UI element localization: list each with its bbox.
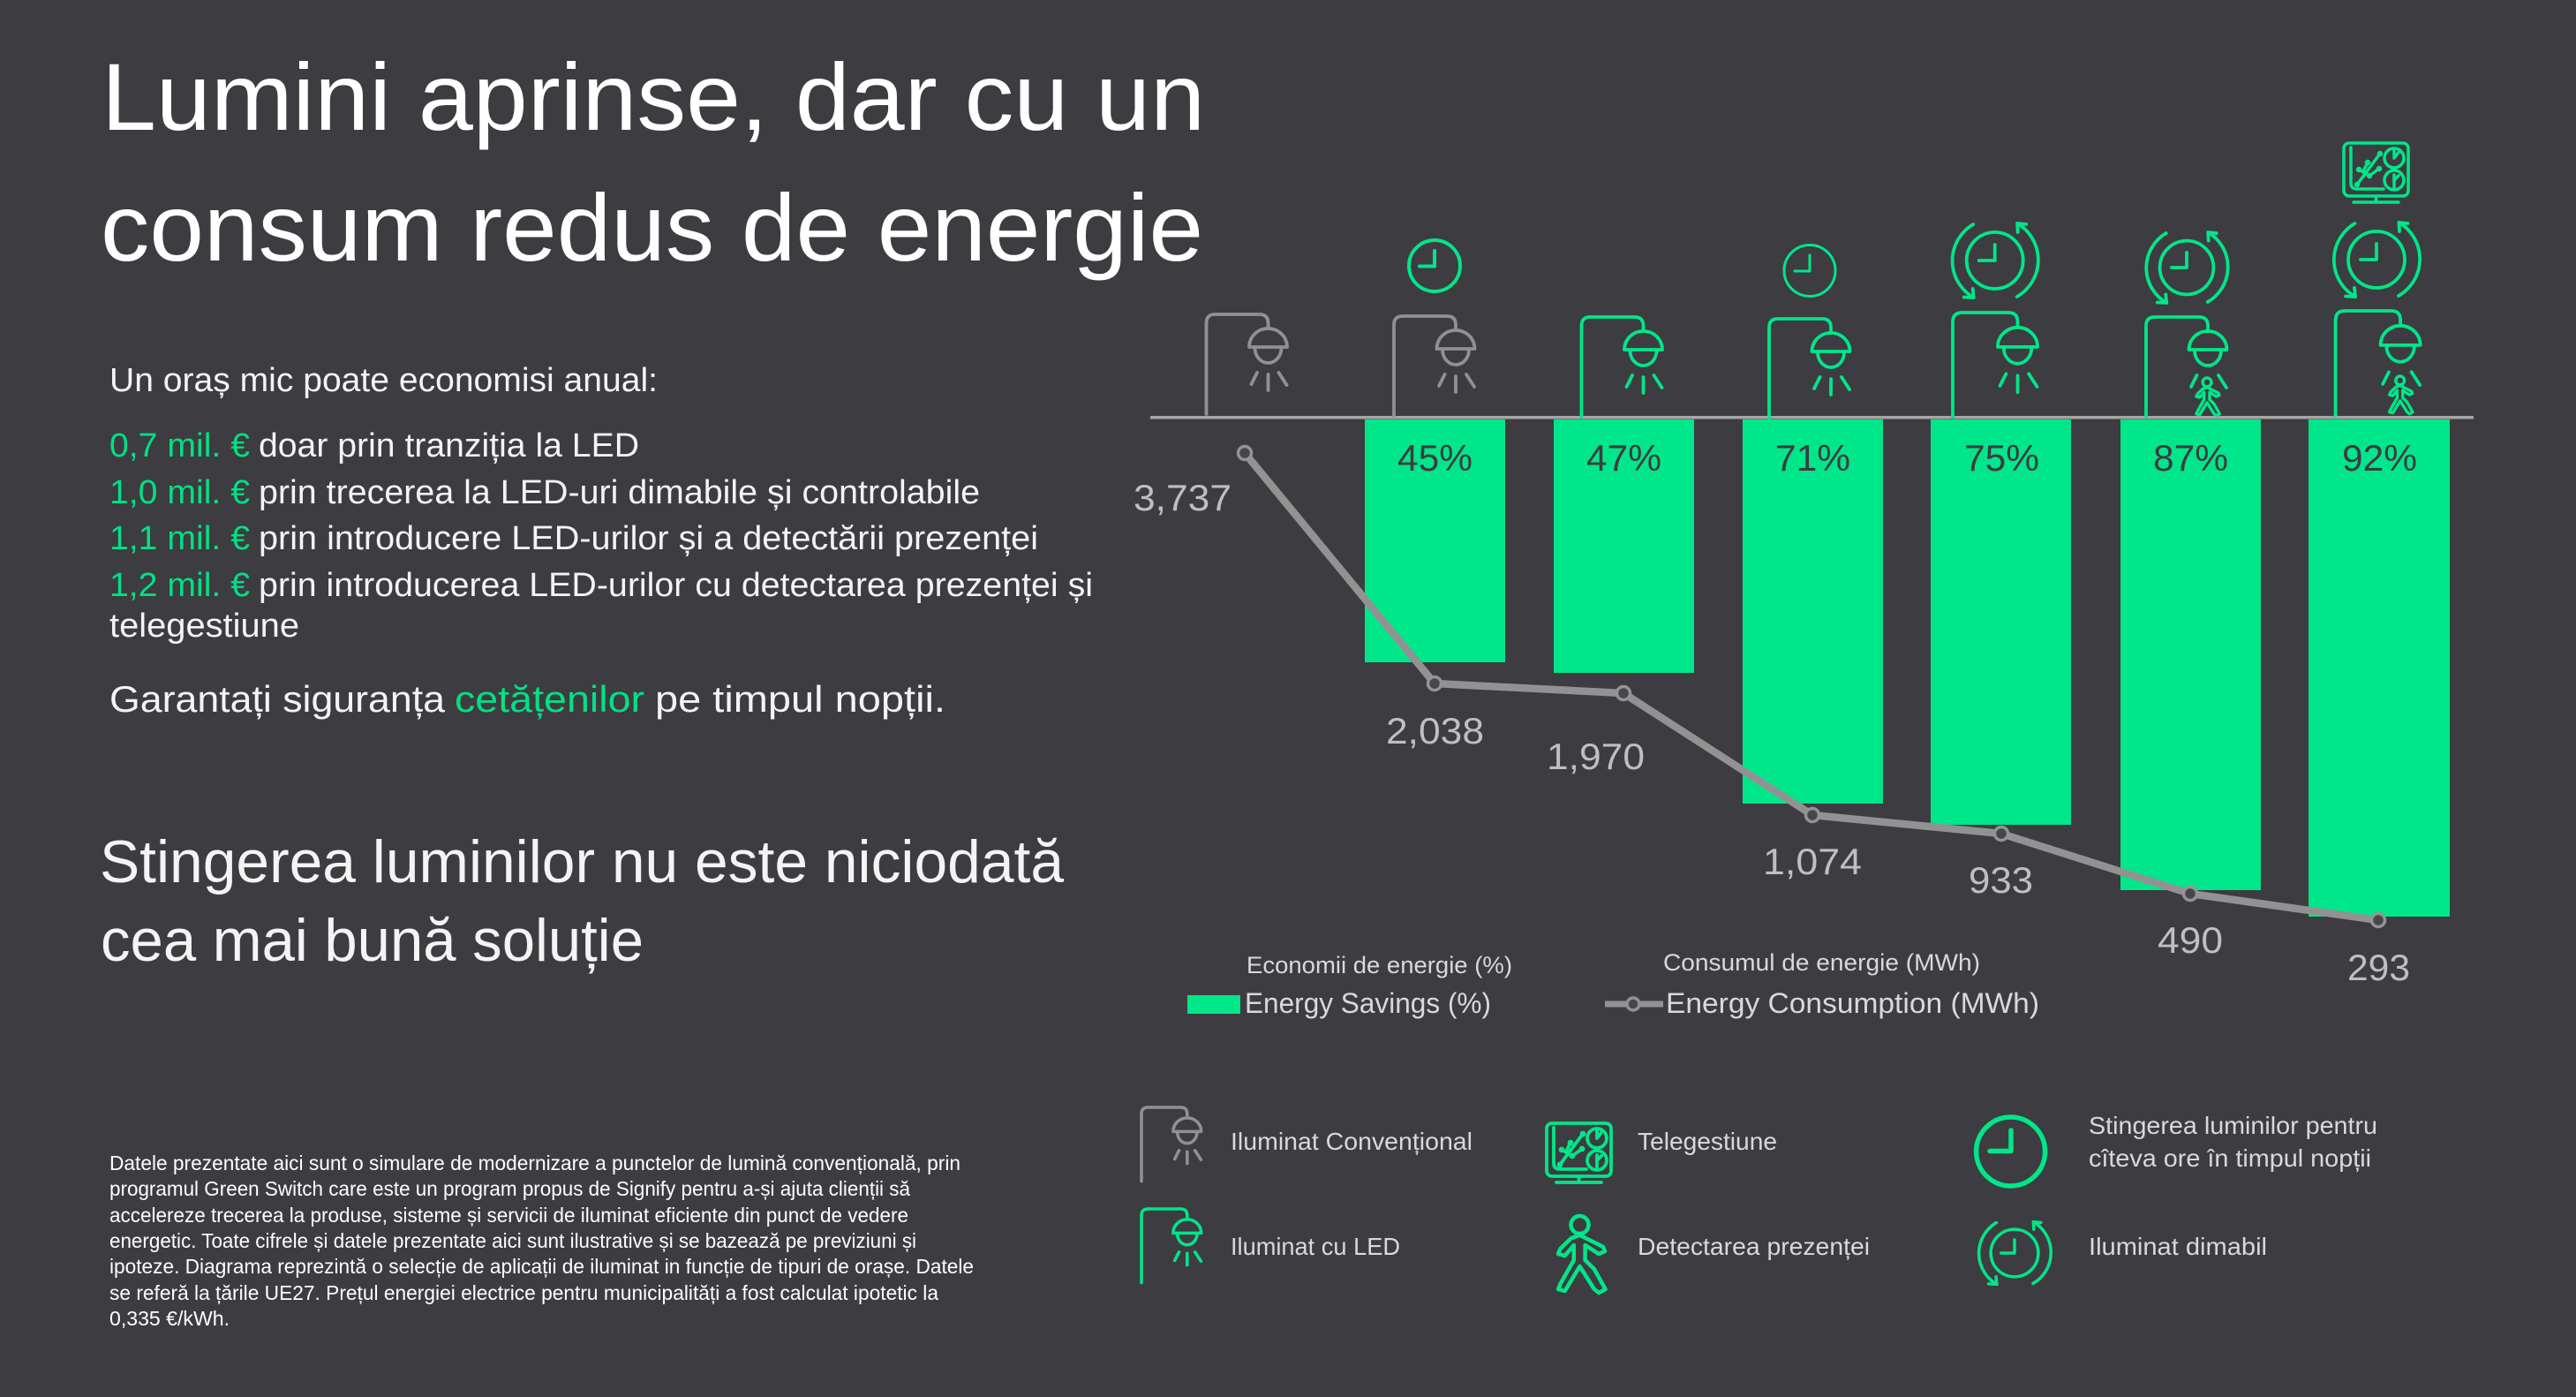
icon: conventional lamp [1206,314,1287,414]
bar percentage labels: 87% [2153,437,2228,479]
text block: annual savings: doar prin tranziția la LED [259,427,639,464]
icon: LED lamp with dimming [1953,223,2038,418]
consumption value labels: 293 [2347,947,2410,988]
axis baseline [1150,416,2474,419]
footnote: se referă la țările UE27. Prețul energiei electrice pentru municipalități a fost calculat ipotetic la [109,1281,938,1304]
consumption value labels: 490 [2158,919,2223,961]
key: telemanagement: Telegestiune [1638,1128,1777,1155]
legend: energy savings: Energy Savings (%) [1245,987,1491,1019]
icon: person [2390,376,2413,414]
footnote: programul Green Switch care este un program propus de Signify pentru a-și ajuta clienții să [109,1177,910,1200]
bar percentage labels [1397,437,2417,479]
legend: energy consumption: Consumul de energie (MWh) [1663,949,1980,976]
consumption value labels: 2,038 [1386,710,1484,751]
text block: annual savings: prin introducere LED-urilor și a detectării prezenței [259,520,1038,557]
subheading: Stingerea luminilor nu este niciodată [100,828,1064,895]
key: conventional lighting: Iluminat Convențional [1231,1128,1473,1155]
subheading [100,828,1064,974]
chart: energy savings bars and consumption line [1134,416,2474,988]
key: dimmable lighting: Iluminat dimabil [2089,1233,2267,1260]
icon: lamp [1394,316,1474,416]
icon: dimming clock [2334,223,2420,297]
text block: citizen safety: cetățenilor [455,678,644,720]
key: conventional lighting [1141,1107,1473,1182]
title [101,43,1205,281]
text block: annual savings: telegestiune [109,608,299,645]
icon: clock [1409,240,1460,291]
key: lights off for a few hours: Stingerea luminilor pentru [2089,1112,2377,1139]
icon: lamp [2336,311,2421,416]
chart legend [1187,949,2039,1019]
icon: dimming clock [2146,232,2228,303]
text block: citizen safety [109,678,945,720]
line series: energy consumption [1238,447,2385,927]
footnote: ipoteze. Diagrama reprezintă o selecție de aplicații de iluminat in funcție de tipuri de orașe. Datele [109,1255,974,1278]
icon: person [2196,378,2219,416]
legend: energy consumption: Energy Consumption (MWh) [1666,987,2039,1019]
key: lights off for a few hours [1977,1112,2377,1186]
text block: annual savings: Un oraș mic poate economisi anual: [109,362,658,399]
icon: dimming clock [1953,223,2038,298]
text block: annual savings: 1,1 mil. € [109,520,250,557]
footnote: Datele prezentate aici sunt o simulare de modernizare a punctelor de lumină convențională, prin [109,1152,960,1174]
legend: energy savings [1187,952,1512,1019]
icon: LED lamp [1582,317,1662,417]
key: telemanagement [1547,1123,1777,1182]
consumption value labels: 1,074 [1763,841,1862,882]
icon: LED lamp with dimming, presence detection and telemanagement [2334,143,2421,416]
consumption value labels: 1,970 [1547,736,1645,777]
bar percentage labels: 92% [2342,437,2417,479]
key: dimmable lighting [1979,1222,2267,1284]
consumption value labels: 3,737 [1134,477,1232,518]
key: LED lighting: Iluminat cu LED [1231,1233,1400,1260]
footnote: 0,335 €/kWh. [109,1307,230,1330]
icon: clock [1784,245,1835,297]
text block: annual savings: 0,7 mil. € [109,427,250,464]
icon: lamp [1769,319,1850,419]
icon: conventional lamp with clock [1394,240,1474,416]
key: presence detection: Detectarea prezenței [1638,1233,1870,1260]
footnote: accelereze trecerea la produse, sisteme și servicii de iluminat eficiente din punct de vedere [109,1204,908,1227]
bar percentage labels: 47% [1586,437,1661,479]
text block: annual savings: prin introducerea LED-urilor cu detectarea prezenței și [259,567,1093,604]
icon: lamp [2146,317,2226,417]
title: consum redus de energie [101,174,1203,281]
text block: annual savings [109,362,1093,645]
icon: lamp [1953,313,2037,418]
legend: energy consumption [1605,949,2039,1019]
icon: telemanagement monitor [2344,143,2408,202]
footnote [109,1152,974,1330]
legend: energy savings: Economii de energie (%) [1247,952,1512,978]
icon key [1141,1107,2377,1293]
bar series: energy savings [1365,419,2450,917]
bar percentage labels: 75% [1964,437,2039,479]
consumption value labels [1134,477,2410,988]
key: presence detection [1558,1216,1870,1293]
bar percentage labels: 71% [1775,437,1850,479]
text block: annual savings: 1,2 mil. € [109,567,250,604]
bar percentage labels: 45% [1397,437,1473,479]
key: lights off for a few hours: cîteva ore în timpul nopții [2089,1144,2371,1172]
key: LED lighting [1141,1209,1400,1283]
icon: LED lamp with clock [1769,245,1850,419]
title: Lumini aprinse, dar cu un [102,43,1205,150]
subheading: cea mai bună soluție [101,907,644,974]
consumption value labels: 933 [1969,859,2033,901]
text block: annual savings: prin trecerea la LED-uri dimabile și controlabile [259,474,980,511]
icon: LED lamp with dimming and presence detection [2146,232,2228,417]
text block: citizen safety: Garantați siguranța [109,678,446,720]
text block: annual savings: 1,0 mil. € [109,474,250,511]
footnote: energetic. Toate cifrele și datele prezentate aici sunt ilustrative și se bazează pe previziuni și [109,1229,916,1252]
text block: citizen safety: pe timpul nopții. [655,678,945,720]
